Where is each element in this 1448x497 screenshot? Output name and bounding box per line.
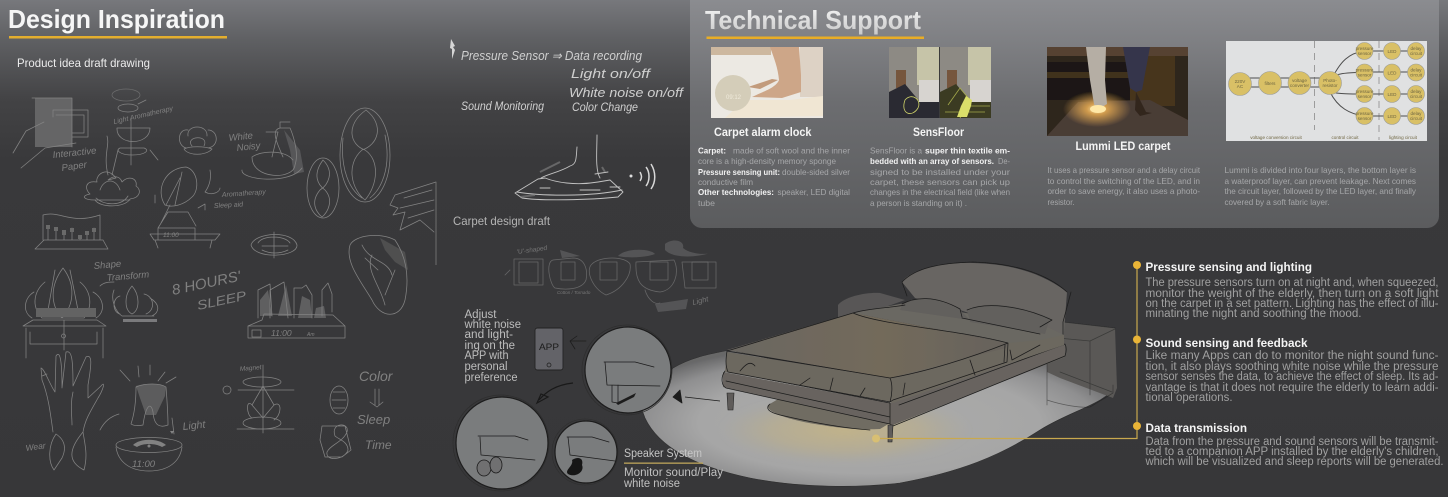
- sketch: hand with wearable: [25, 352, 104, 470]
- text block: sound sensing and feedback: tion, it also plays soothing white noise while the pressure: [1146, 361, 1438, 373]
- text: 8 hours sleep note: [171, 268, 248, 313]
- text: shape transform note: Transform: [106, 269, 150, 284]
- text: pressure sensor notes: Pressure Sensor ⇒ Data recording: [461, 49, 642, 63]
- diagram: Lummi circuit: 220V: [1235, 79, 1246, 84]
- headboard: [902, 263, 1067, 345]
- text block: pressure sensing and lighting: The pressure sensors turn on at night and, when squeezed,: [1146, 277, 1438, 289]
- diagram: Lummi circuit: filters: [1265, 81, 1276, 86]
- text: Lummi LED description: [1048, 165, 1201, 207]
- diagram: Lummi circuit: sensor: [1358, 51, 1372, 56]
- sketch: white noise cup: Noisy: [236, 140, 262, 154]
- sketch: light aromatherapy lamp: Light Aromatherapy: [113, 105, 174, 126]
- diagram: Lummi circuit: circuit: [1410, 51, 1423, 56]
- annotation: adjust white noise on app: preference: [464, 372, 518, 384]
- text: pressure sensor notes: [461, 49, 685, 114]
- diagram: Lummi circuit: sensor: [1358, 94, 1372, 99]
- text block: data transmission: Data transmission: [1146, 421, 1247, 435]
- sketch: carpet design variants: [505, 241, 716, 312]
- photo: SensFloor demo: [889, 47, 991, 118]
- text: Lummi layers description: covered by a soft fabric layer.: [1224, 197, 1330, 207]
- diagram: Lummi circuit: sensor: [1358, 116, 1372, 121]
- text: SensFloor description: carpet, these sensors can pick up: [870, 177, 1010, 187]
- diagram: Lummi circuit: [1226, 41, 1427, 141]
- diagram: Lummi circuit: LED: [1388, 92, 1397, 97]
- sketch: color sleep time notes: [320, 368, 394, 459]
- text: Lummi layers description: [1224, 165, 1417, 207]
- diagram: Lummi circuit: voltage conversion circuit: [1250, 135, 1303, 140]
- text: SensFloor description: a person is standing on it) .: [870, 198, 967, 208]
- diagram: Lummi circuit: LED: [1388, 70, 1397, 76]
- sketch: light aromatherapy lamp: [112, 89, 174, 165]
- sketch: blossom: [179, 127, 216, 154]
- diagram: Lummi circuit: lighting circuit: [1389, 135, 1418, 140]
- annotation: adjust white noise on app: white noise: [464, 319, 521, 331]
- diagram: Lummi circuit: sensor: [1358, 72, 1372, 78]
- panel: product idea sketches: [13, 89, 436, 471]
- text block: pressure sensing and lighting: Pressure sensing and lighting: [1146, 260, 1312, 274]
- sketch: interactive paper: Paper: [61, 159, 88, 174]
- annotation: adjust white noise on app: [464, 309, 521, 384]
- sketch: hand with wearable: Wear: [25, 440, 47, 453]
- text: carpet alarm clock description: speaker, LED digital: [778, 187, 850, 197]
- sketch: lamp and clock: [100, 365, 207, 471]
- text: 8 hours sleep note: 8 HOURS': [171, 268, 244, 299]
- sketch: gramophone: 11:00: [163, 232, 179, 239]
- annotation: speaker system: white noise: [623, 478, 680, 490]
- icon: phone with app: [535, 328, 563, 370]
- diagram: Lummi circuit: delay: [1411, 46, 1422, 51]
- text: carpet alarm clock description: double-sided silver: [782, 167, 850, 177]
- text: SensFloor description: super thin textile em-: [925, 146, 1010, 156]
- sketch: white noise cup: White: [228, 131, 253, 144]
- text: shape transform note: [93, 259, 150, 284]
- sketch: color sleep time notes: Sleep: [357, 412, 390, 427]
- detail circle: speaker variant two: [552, 419, 618, 485]
- diagram: Lummi circuit: resistor: [1322, 83, 1338, 88]
- text: SensFloor description: SensFloor is a: [870, 146, 922, 156]
- diagram: Lummi circuit: voltage: [1292, 78, 1307, 83]
- pillows: [900, 299, 1050, 334]
- panel: handwritten function notes: [450, 39, 685, 200]
- text: pressure sensor notes: White noise on/off: [569, 86, 685, 100]
- text block: sound sensing and feedback: tional operations.: [1146, 392, 1232, 404]
- sketch: sound bar panel: [35, 214, 108, 249]
- diagram: Lummi circuit: pressure: [1356, 68, 1374, 72]
- caption: product idea draft drawing: Product idea draft drawing: [17, 56, 150, 70]
- carpet: [642, 345, 1116, 486]
- sketch: crystal clock base: 11:00: [271, 328, 292, 338]
- text: Lummi LED description: It uses a pressure sensor and a delay circuit: [1048, 165, 1201, 175]
- bed legs: [727, 393, 893, 442]
- diagram: Lummi circuit: circuit: [1410, 116, 1423, 121]
- diagram: Lummi circuit: LED: [1388, 114, 1397, 119]
- arrow: circle to speaker detail: [537, 383, 573, 403]
- diagram: Lummi circuit: circuit: [1410, 72, 1423, 78]
- photo: carpet alarm clock: [711, 47, 823, 118]
- annotation: adjust white noise on app: and light-: [464, 329, 513, 341]
- sketch: white noise cup: [228, 122, 304, 179]
- detail circle: speaker in bed frame: [582, 325, 672, 415]
- sketch: lamp and clock: 11:00: [132, 459, 156, 470]
- sketch: crystal clock base: Am: [306, 332, 314, 338]
- under-bed outline: [768, 404, 870, 430]
- text block: pressure sensing and lighting: on the carpet in a set pattern. Lighting has the effect of illu-: [1146, 298, 1439, 310]
- text: SensFloor description: bedded with an array of sensors.: [870, 156, 994, 166]
- text: pressure sensor notes: Light on/off: [571, 67, 652, 81]
- sketch: color sleep time notes: Time: [365, 438, 392, 452]
- sketch: round device: [251, 232, 297, 258]
- diagram: Lummi circuit: control circuit: [1331, 135, 1359, 140]
- panel: technical support: [690, 0, 1439, 228]
- detail circle: speaker variant one: [453, 395, 549, 491]
- text block: pressure sensing and lighting: monitor the weight of the elderly, then turn on a soft light: [1146, 288, 1439, 300]
- text: Lummi LED description: order to save energy, it also uses a photo-: [1048, 186, 1200, 196]
- annotation: speaker system: [623, 448, 723, 490]
- text: carpet alarm clock description: Pressure sensing unit:: [698, 167, 780, 177]
- text: Lummi LED description: resistor.: [1048, 197, 1074, 207]
- text block: sound sensing and feedback: Like many Apps can do to monitor the night sound func-: [1146, 350, 1439, 362]
- sketch: interactive paper: [13, 98, 97, 174]
- text: pressure sensor notes: Color Change: [572, 102, 638, 114]
- diagram: Lummi circuit: Photo-: [1323, 78, 1337, 83]
- annotation: adjust white noise on app: ing on the: [464, 340, 515, 352]
- text block: data transmission: ted to a companion APP installed by the elderly's children,: [1146, 446, 1438, 458]
- text: carpet alarm clock description: made of soft wool and the inner: [733, 146, 850, 156]
- text block: sound sensing and feedback: sensor senses the data, to achieve the effect of sleep. Its ad-: [1146, 371, 1439, 383]
- illustration: carpet under bed: [642, 262, 1117, 486]
- text block: sound sensing and feedback: vantage is that it does not require the elderly to learn addi-: [1146, 382, 1439, 394]
- bedside table left: [838, 293, 905, 322]
- heading: Lummi LED carpet: Lummi LED carpet: [1076, 141, 1171, 153]
- photo: carpet alarm clock: 09:12: [726, 95, 742, 101]
- text: carpet alarm clock description: tube: [698, 198, 715, 208]
- text: Lummi LED description: to control the switching of the LED, and in: [1048, 176, 1200, 186]
- text block: pressure sensing and lighting: [1146, 260, 1439, 320]
- text: carpet alarm clock description: core is a high-density memory sponge: [698, 156, 836, 166]
- diagram: Lummi circuit: pressure: [1356, 89, 1374, 94]
- sketch: carpet design variants: Cotton / Tornado: [557, 290, 591, 295]
- annotation: speaker system: Speaker System: [624, 448, 702, 460]
- sketch: magnetic levitation lamp: [223, 364, 294, 433]
- diagram: Lummi circuit: LED: [1388, 49, 1397, 54]
- text block: data transmission: [1145, 421, 1444, 468]
- icon: lightning bolt: [450, 39, 455, 59]
- text: SensFloor description: signed to be installed under your: [870, 167, 1010, 177]
- photo: Lummi LED carpet: [1047, 47, 1188, 136]
- diagram: Lummi circuit: AC: [1237, 84, 1244, 89]
- sketch: lotus on bedside table: [23, 268, 106, 358]
- heading: SensFloor: SensFloor: [913, 127, 964, 139]
- diagram: Lummi circuit: pressure: [1356, 111, 1374, 116]
- diagram: Lummi circuit: pressure: [1356, 46, 1374, 51]
- text block: sound sensing and feedback: [1146, 336, 1439, 404]
- heading: technical support: Technical Support: [705, 5, 921, 35]
- arrow: detail pointer on carpet: [673, 390, 720, 403]
- mattress side: [725, 335, 1064, 403]
- text: pressure sensor notes: Sound Monitoring: [461, 99, 544, 113]
- sketch: gramophone: [150, 167, 266, 248]
- annotation: adjust white noise on app: personal: [464, 361, 508, 373]
- icon: phone with app: APP: [539, 342, 559, 353]
- sketch: small lotus: [100, 282, 158, 322]
- diagram: Lummi circuit: delay: [1411, 89, 1422, 94]
- text: Lummi layers description: a waterproof layer, can prevent leakage. Next comes: [1224, 176, 1416, 186]
- text block: data transmission: Data from the pressure and sound sensors will be transmit-: [1146, 436, 1439, 448]
- sketch: carpet design variants: 'U'-shaped: [516, 245, 548, 256]
- text: SensFloor description: [870, 146, 1010, 208]
- text: carpet alarm clock description: [698, 146, 850, 208]
- sketch: braided shapes: [349, 182, 436, 314]
- text: shape transform note: Shape: [93, 259, 122, 272]
- diagram: Lummi circuit: delay: [1411, 111, 1422, 116]
- text: SensFloor description: De-: [998, 156, 1010, 166]
- annotation: speaker system: Monitor sound/Play: [624, 467, 723, 479]
- sketch: lotus lamp: [84, 136, 139, 206]
- sheet behind pillows: [853, 303, 1064, 345]
- diagram: Lummi circuit: delay: [1411, 68, 1422, 72]
- mattress top: [727, 313, 1008, 378]
- sketch: carpet design variants: Light: [691, 294, 710, 307]
- text block: pressure sensing and lighting: minating the night and soothing the mood.: [1146, 308, 1362, 320]
- sketch: carpet pressure and sound: [515, 135, 655, 200]
- text: Lummi layers description: the circuit layer, followed by the LED layer, and finally: [1224, 186, 1417, 196]
- sketch: magnetic levitation lamp: Magnet: [240, 364, 263, 373]
- text block: sound sensing and feedback: Sound sensing and feedback: [1146, 336, 1308, 350]
- text: carpet alarm clock description: Carpet:: [698, 146, 726, 156]
- annotation: adjust white noise on app: Adjust: [464, 309, 497, 321]
- sketch: lamp and clock: Light: [182, 419, 207, 433]
- heading: Design Inspiration: Design Inspiration: [8, 4, 225, 34]
- text: SensFloor description: changes in the electrical field (like when: [870, 187, 1010, 197]
- text: Lummi layers description: Lummi is divided into four layers, the bottom layer is: [1224, 165, 1416, 175]
- sketch: gramophone: Sleep aid: [214, 201, 244, 210]
- diagram: Lummi circuit: circuit: [1410, 94, 1423, 99]
- bedside table right: [1047, 322, 1117, 407]
- under-bed shadow: [768, 398, 890, 429]
- text: carpet alarm clock description: conductive film: [698, 177, 753, 187]
- base: [723, 345, 1065, 425]
- bed: [722, 262, 1071, 442]
- connector: timeline to carpet sensor: [872, 261, 1141, 442]
- sketch: interactive paper: Interactive: [52, 145, 97, 161]
- sketch: gramophone: Aromatherapy: [221, 189, 266, 199]
- diagram: Lummi circuit: converter: [1290, 83, 1310, 88]
- heading: carpet alarm clock: Carpet alarm clock: [714, 127, 812, 139]
- text: 8 hours sleep note: SLEEP: [196, 288, 248, 313]
- annotation: adjust white noise on app: APP with: [464, 350, 508, 362]
- text block: data transmission: which will be visualized and sleep reports will be generated.: [1145, 456, 1444, 468]
- sketch: chain carpet shapes: [307, 108, 390, 218]
- text: carpet alarm clock description: Other technologies:: [698, 187, 774, 197]
- sketch: color sleep time notes: Color: [359, 368, 394, 384]
- arrow: circle to phone: [570, 336, 586, 349]
- sketch: crystal clock base: [248, 282, 345, 338]
- caption: carpet design draft: Carpet design draft: [453, 214, 551, 228]
